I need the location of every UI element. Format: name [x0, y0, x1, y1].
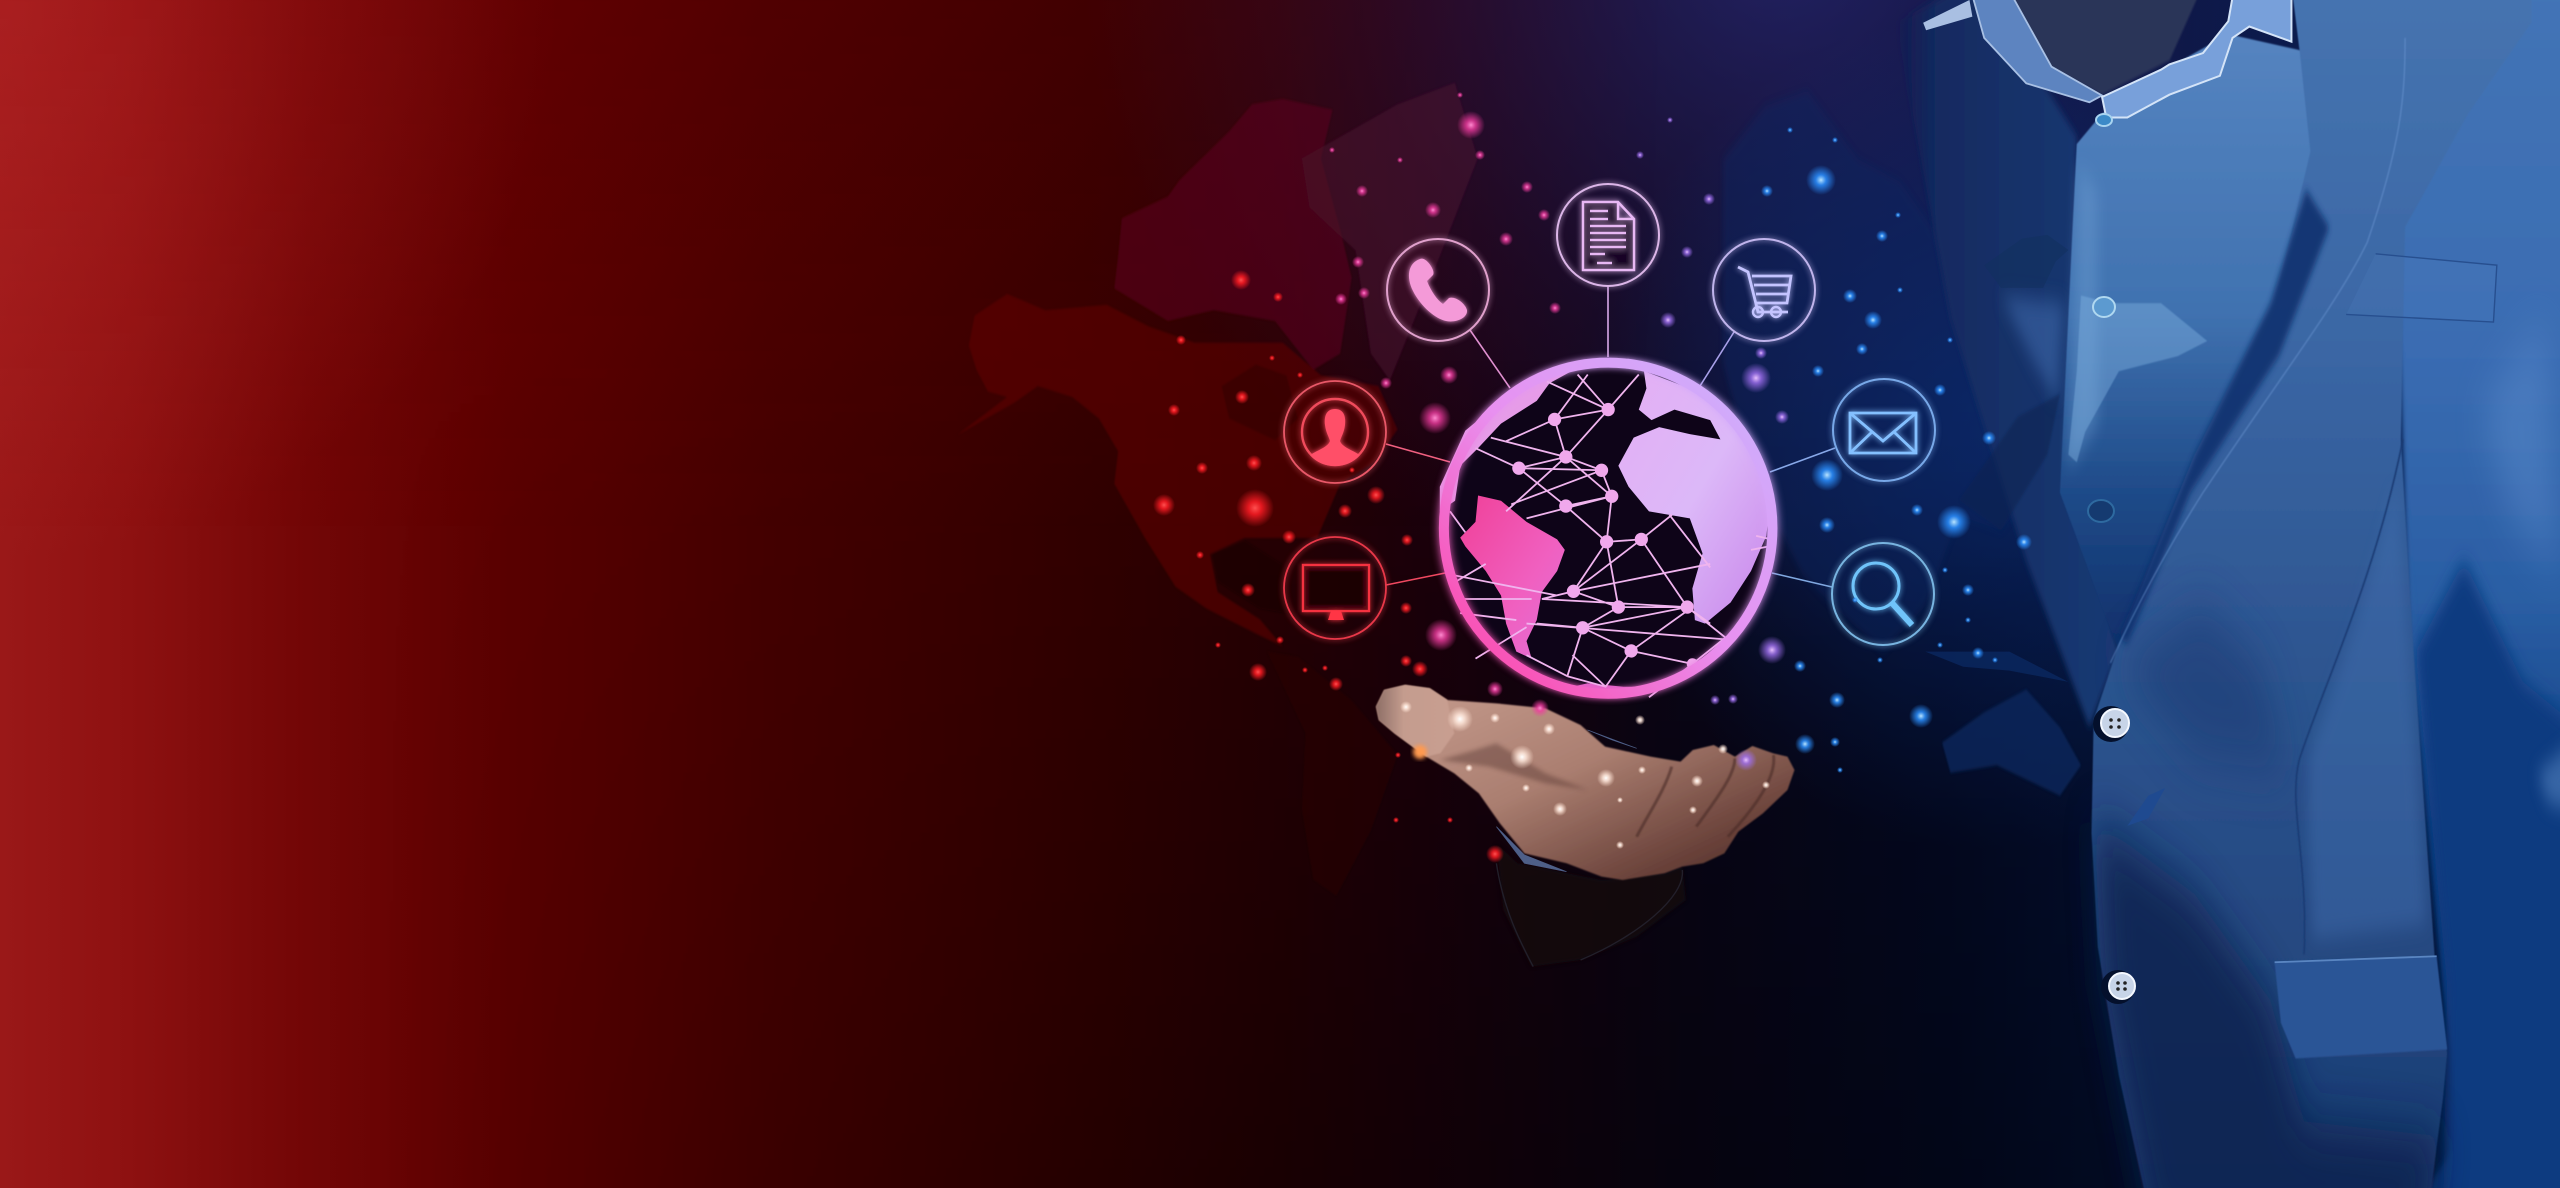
hand [1376, 685, 1794, 880]
side pocket flap [2275, 956, 2447, 1059]
breast pocket [2346, 254, 2497, 322]
chest highlight [2001, 296, 2064, 402]
Alaska and North America [957, 294, 1398, 646]
Hudson Bay [1221, 364, 1298, 440]
globe [1440, 359, 1777, 698]
New Zealand [2127, 788, 2165, 826]
icon: person [1284, 381, 1386, 483]
pink particles [1329, 92, 1561, 717]
globe dark disc [1440, 359, 1777, 697]
shirt buttons [2088, 114, 2115, 522]
jacket lower shadow [2094, 818, 2443, 1188]
icon: envelope [1833, 379, 1935, 481]
jacket body [2092, 0, 2531, 1188]
Australia [1942, 690, 2081, 796]
collar left [1972, 0, 2102, 102]
flap top edge [2275, 956, 2437, 962]
Japan and east Asia [1959, 394, 2060, 530]
hand sleeve [1496, 730, 1686, 967]
world map: Americas [957, 83, 1478, 896]
North America [1440, 359, 1608, 511]
collar sliver at left [1923, 0, 1972, 30]
right arm [2384, 0, 2560, 1188]
lapel inner shadow [2119, 189, 2329, 644]
icon: shopping cart [1713, 239, 1815, 341]
businessman in suit [1896, 0, 2560, 1188]
purple particles [1636, 117, 1789, 771]
jacket button lower [2101, 970, 2135, 1004]
pocket lines [2346, 254, 2497, 322]
orange spark [1413, 745, 1427, 759]
shirt cuff [1496, 730, 1637, 872]
Siberia islands [1984, 235, 2068, 288]
collar right [2102, 0, 2291, 117]
Gulf of Mexico shade [1212, 541, 1290, 614]
shirt [2060, 34, 2321, 652]
globe ring [1444, 363, 1772, 694]
blue particles [1761, 127, 2032, 773]
network nodes [1512, 403, 1698, 670]
icon: magnifier [1832, 543, 1934, 645]
Indonesia [1925, 652, 2068, 682]
icon: document [1557, 184, 1659, 286]
left jacket panel [1896, 0, 2119, 727]
lower sleeve highlight [2538, 743, 2560, 811]
finger shadows [1637, 755, 1774, 837]
icon: monitor [1284, 537, 1386, 639]
icon: phone [1387, 239, 1489, 341]
palm shadow [1440, 743, 1588, 790]
Greenland [1302, 83, 1478, 381]
torso gap shadow [2416, 561, 2560, 1188]
connector lines from icons to globe [1386, 286, 1835, 587]
network lines [1450, 375, 1771, 697]
South America [1460, 496, 1565, 659]
Africa and Europe [1618, 371, 1770, 624]
jacket button upper [2093, 706, 2129, 742]
hand sparkles [1400, 701, 1770, 849]
red particles [1153, 270, 1504, 863]
arm highlight [2481, 318, 2560, 576]
Arctic islands [1114, 99, 1352, 370]
Russia highlight on shirt [2068, 296, 2207, 462]
shirt lit placket [2068, 167, 2098, 470]
Asia silhouette [1723, 91, 2089, 652]
waist shadow [2119, 606, 2287, 773]
map overlay on shirt [1959, 235, 2207, 826]
thumb [1376, 685, 1454, 757]
neck [2001, 0, 2203, 95]
sleeve seam [2296, 439, 2403, 955]
glowing particles [1153, 92, 2032, 863]
sleeve light [2308, 485, 2426, 940]
South America [1267, 652, 1398, 896]
Antarctica [1557, 683, 1659, 698]
lapel edge highlight [2110, 38, 2405, 663]
world map: Asia and Australia background [1723, 91, 2089, 796]
